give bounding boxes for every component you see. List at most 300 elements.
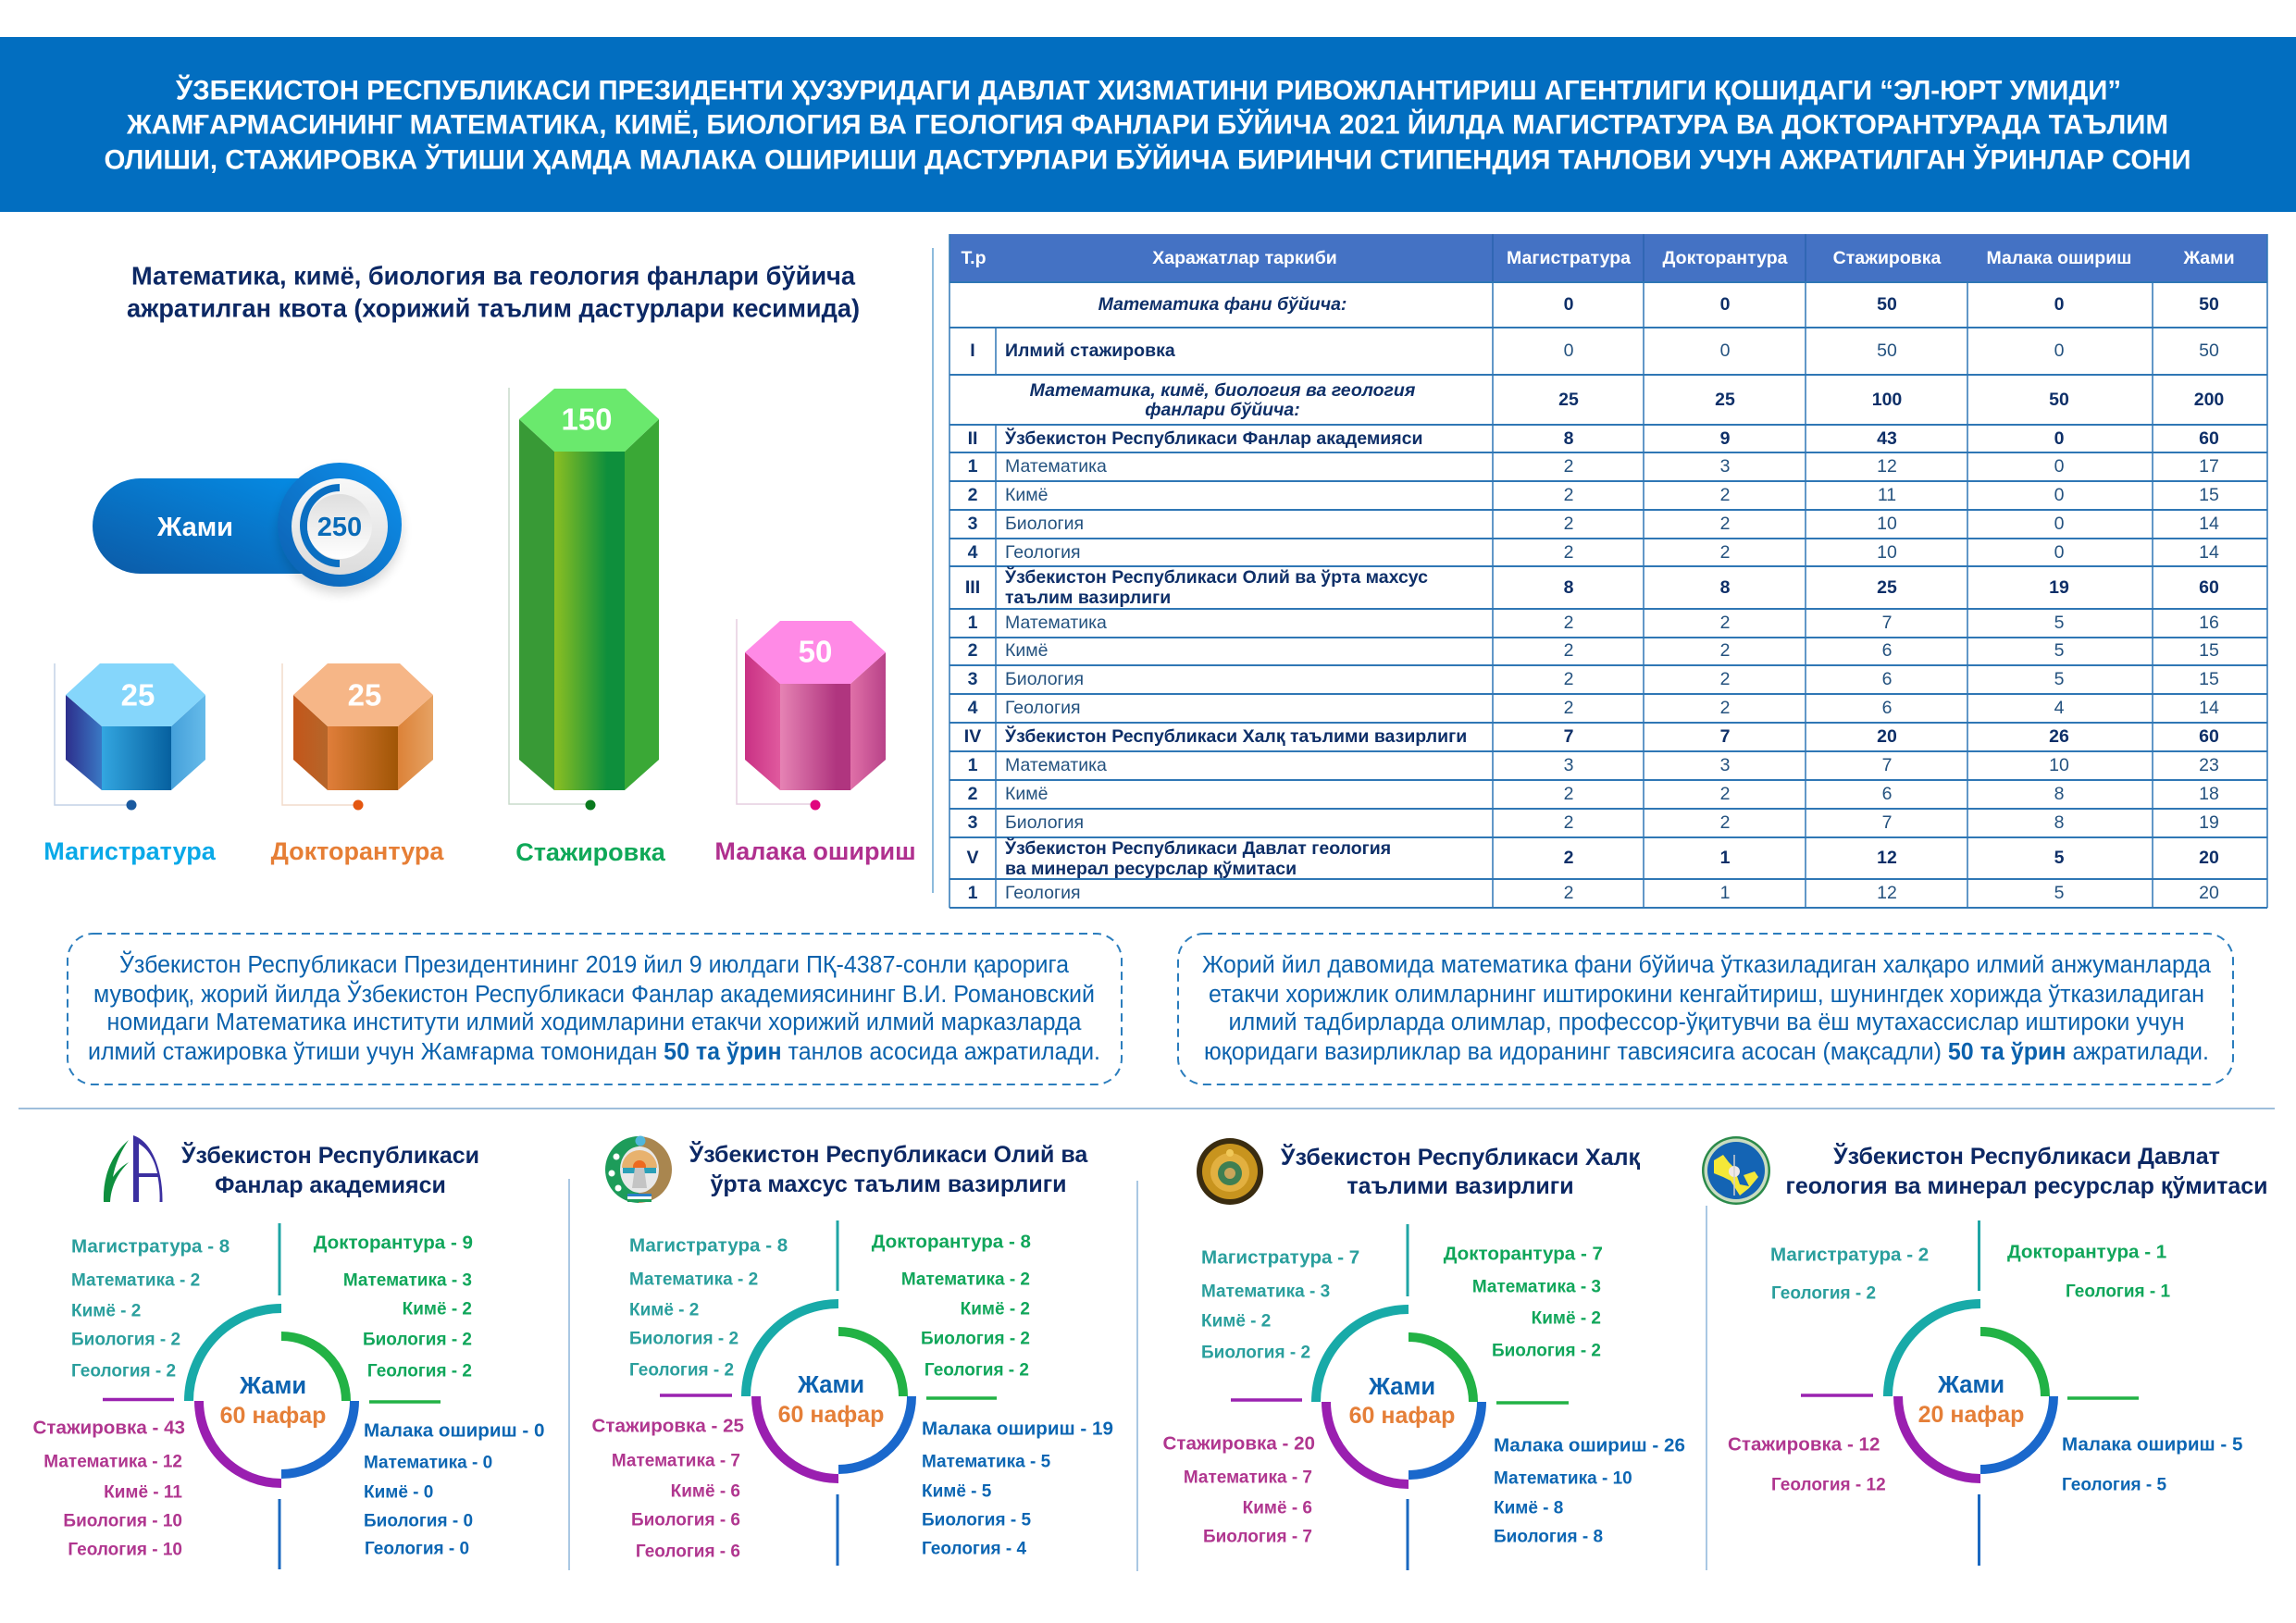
row V [966, 836, 2219, 879]
row I values: 50 [1877, 341, 1897, 361]
row II.4: 14 [2199, 542, 2219, 563]
table header: Магистратура [1507, 248, 1631, 268]
row I values: 50 [2199, 341, 2219, 361]
section row: Математика фани бўйича: Математика фани бўйича: [1098, 294, 1347, 315]
row II.3: 10 [1877, 514, 1897, 534]
ring total: Жами [797, 1372, 864, 1398]
row II.1: 0 [2054, 456, 2065, 477]
ring chart [660, 1220, 997, 1566]
table header: Докторантура [1663, 248, 1788, 268]
row III.3: 6 [1882, 669, 1892, 689]
row III.2: 15 [2199, 640, 2219, 661]
Докторантура list: Кимё - 2 [403, 1299, 472, 1319]
row III.1: 2 [1720, 613, 1730, 633]
row IV.2: Кимё [1005, 784, 1049, 804]
Стажировка list: Геология - 6 [636, 1542, 740, 1562]
section row: all subjects: 50 [2049, 390, 2069, 410]
ring total [778, 1372, 884, 1428]
row V: 12 [1877, 848, 1897, 868]
chart heading: ажратилган квота (хорижий таълим дастурлари кесимида) [127, 294, 860, 322]
Малака ошириш list: Кимё - 5 [922, 1482, 992, 1501]
Магистратура list: Биология - 2 [629, 1329, 738, 1349]
section row: Математика фани бўйича: 0 [2054, 294, 2065, 315]
panel: Давлат геология қўмитаси [1702, 1136, 2268, 1566]
row V.1: Геология [1005, 883, 1081, 903]
row IV.2: 6 [1882, 784, 1892, 804]
Малака ошириш list: Кимё - 0 [364, 1482, 433, 1503]
Магистратура list: Кимё - 2 [629, 1301, 699, 1319]
Малака ошириш list: Биология - 8 [1494, 1527, 1603, 1547]
row II.4: 4 [968, 542, 978, 563]
row III.3: 15 [2199, 669, 2219, 689]
panel: data table [949, 234, 2267, 908]
Докторантура list: Геология - 2 [925, 1360, 1029, 1381]
row IV: 26 [2049, 726, 2069, 747]
Стажировка list: Кимё - 6 [1243, 1499, 1312, 1518]
row III [965, 565, 2219, 608]
Магистратура list: Магистратура - 8 [71, 1236, 230, 1257]
Стажировка list: Геология - 12 [1771, 1475, 1886, 1495]
panel: Фанлар академияси [33, 1135, 544, 1569]
row III.2: 6 [1882, 640, 1892, 661]
row II.2: 15 [2199, 485, 2219, 505]
bar: Докторантура 25: Докторантура [271, 837, 444, 865]
row II.1 [968, 456, 2219, 477]
icon: gold seal [1197, 1138, 1263, 1205]
Магистратура list: Математика - 2 [71, 1271, 200, 1290]
Стажировка list [1163, 1432, 1315, 1547]
row V.1: 1 [1720, 883, 1730, 903]
callout: left note: Ўзбекистон Республикаси Президентининг 2019 йил 9 июлдаги ПҚ-4387-сонли қарорига [119, 950, 1070, 978]
section row: all subjects: 25 [1715, 390, 1735, 410]
ring total: Жами [239, 1373, 306, 1399]
row III.4: 14 [2199, 698, 2219, 718]
row II.4: Геология [1005, 542, 1081, 563]
callout: right note: етакчи хорижлик олимларнинг иштирокини кенгайтириш, шунингдек хорижда ўтказиладиган [1209, 982, 2204, 1008]
row III.3: 5 [2054, 669, 2065, 689]
row III.4 [968, 698, 2219, 718]
row III: 19 [2049, 577, 2069, 598]
row III.4: 4 [2054, 698, 2065, 718]
row IV.2: 2 [968, 784, 978, 804]
panel: Олий ва ўрта махсус таълим вазирлиги [592, 1136, 1113, 1566]
Магистратура list: Геология - 2 [1771, 1284, 1876, 1303]
Малака ошириш list: Математика - 0 [364, 1453, 492, 1473]
Докторантура list [872, 1231, 1031, 1381]
row II.2: Кимё [1005, 485, 1049, 505]
total pill: Жами 250: 250 [317, 513, 362, 542]
panel heading: Ўзбекистон Республикаси Халқ [1280, 1143, 1640, 1171]
row III.2: Кимё [1005, 640, 1049, 661]
row III.1: 1 [968, 613, 978, 633]
panel heading: геология ва минерал ресурслар қўмитаси [1785, 1173, 2268, 1199]
Малака ошириш list: Биология - 5 [922, 1510, 1031, 1530]
row II.1: 17 [2199, 456, 2219, 477]
row I values: 0 [2054, 341, 2065, 361]
row I values: 0 [1564, 341, 1574, 361]
row IV.3: 19 [2199, 812, 2219, 833]
Докторантура list: Математика - 3 [1472, 1277, 1601, 1297]
callout: left note: илмий стажировка ўтиши учун Жамғарма томонидан 50 та ўрин танлов асосида ажратилади. [88, 1039, 1100, 1065]
row IV: 60 [2199, 726, 2219, 747]
row III: 8 [1564, 577, 1574, 598]
section row: Математика фани бўйича: 0 [1720, 294, 1731, 315]
row II.4: 0 [2054, 542, 2065, 563]
Стажировка list [592, 1416, 744, 1562]
Магистратура list [1770, 1244, 1929, 1303]
row IV.1: 23 [2199, 755, 2219, 775]
panel heading: Ўзбекистон Республикаси Олий ва [689, 1140, 1088, 1168]
Малака ошириш list: Математика - 5 [922, 1453, 1051, 1471]
row II.2: 2 [1720, 485, 1730, 505]
row III.3 [968, 669, 2219, 689]
Докторантура list [2007, 1242, 2170, 1301]
section row: all subjects: 25 [1558, 390, 1579, 410]
section row: all subjects [1030, 380, 2224, 420]
Магистратура list: Геология - 2 [629, 1360, 734, 1381]
ring chart [103, 1223, 441, 1569]
ring chart [1231, 1224, 1569, 1570]
Магистратура list: Математика - 3 [1201, 1282, 1330, 1301]
ring total: Жами [1368, 1374, 1435, 1400]
Магистратура list: Математика - 2 [629, 1270, 758, 1290]
row II: 60 [2199, 428, 2219, 449]
row IV: 7 [1564, 726, 1573, 747]
icon: state emblem [605, 1136, 672, 1203]
row II: Ўзбекистон Республикаси Фанлар академияси [1004, 427, 1422, 449]
row IV.2: 18 [2199, 784, 2219, 804]
row II: 0 [2054, 428, 2065, 449]
row III: таълим вазирлиги [1005, 588, 1171, 608]
row IV.2: 8 [2054, 784, 2064, 804]
callout: left note: номидаги Математика институти илмий ходимларини етакчи хорижий илмий марказларда [107, 1010, 1082, 1035]
row II.3: 14 [2199, 514, 2219, 534]
panel heading [1785, 1142, 2268, 1199]
Малака ошириш list: Геология - 4 [922, 1540, 1026, 1558]
row III.2: 2 [1564, 640, 1573, 661]
Докторантура list: Кимё - 2 [961, 1299, 1030, 1319]
row V.1: 1 [968, 883, 978, 903]
row I values: 0 [1720, 341, 1731, 361]
table header: Т.р [961, 248, 987, 268]
bar: Магистратура 25: 25 [121, 677, 155, 712]
Магистратура list [1201, 1247, 1359, 1362]
table header: Стажировка [1833, 248, 1942, 268]
row III.2: 2 [1720, 640, 1730, 661]
row II.1: 1 [968, 456, 978, 477]
callout: right note: Жорий йил давомида математика фани бўйича ўтказиладиган халқаро илмий анжуманларда [1202, 952, 2212, 978]
row II.1: Математика [1005, 456, 1107, 477]
Стажировка list [1728, 1434, 1886, 1495]
row II: II [968, 428, 977, 449]
chart heading [127, 261, 860, 322]
row III.1: Математика [1005, 613, 1107, 633]
Стажировка list: Математика - 12 [43, 1453, 182, 1471]
Магистратура list: Кимё - 2 [71, 1301, 141, 1321]
header banner [0, 37, 2296, 212]
row II.2: 2 [1564, 485, 1573, 505]
row III.1: 5 [2054, 613, 2065, 633]
Докторантура list: Докторантура - 8 [872, 1231, 1031, 1253]
row I: I [970, 341, 975, 361]
row II.4 [968, 542, 2219, 563]
row III.1: 16 [2199, 613, 2219, 633]
row IV.1 [968, 755, 2219, 775]
row II.3: 2 [1564, 514, 1573, 534]
icon: FA logo [104, 1135, 163, 1202]
row III.3: Биология [1005, 669, 1084, 689]
Докторантура list: Математика - 3 [343, 1271, 472, 1290]
Магистратура list: Биология - 2 [1201, 1344, 1310, 1362]
row II: 43 [1877, 428, 1897, 449]
Магистратура list: Кимё - 2 [1201, 1312, 1271, 1331]
Докторантура list: Докторантура - 9 [314, 1233, 473, 1253]
table header: Харажатлар таркиби [1152, 248, 1337, 268]
Стажировка list: Геология - 10 [68, 1540, 182, 1560]
row V: ва минерал ресурслар қўмитаси [1005, 859, 1297, 879]
Стажировка list: Математика - 7 [612, 1451, 740, 1471]
row IV.3: 2 [1720, 812, 1730, 833]
chart heading: Математика, кимё, биология ва геология фанлари бўйича [131, 261, 856, 291]
row IV.2: 2 [1720, 784, 1730, 804]
row III.4: 2 [1720, 698, 1730, 718]
row II.4: 2 [1720, 542, 1730, 563]
panel heading: Ўзбекистон Республикаси Давлат [1832, 1142, 2220, 1170]
row II.2: 0 [2054, 485, 2065, 505]
row III.3: 2 [1720, 669, 1730, 689]
row IV.1: 7 [1882, 755, 1892, 775]
row III.4: 4 [968, 698, 978, 718]
section row: all subjects: фанлари бўйича: [1145, 400, 1300, 420]
row I: Илмий стажировка [1005, 341, 1175, 361]
row V.1: 12 [1877, 883, 1897, 903]
bar: Малака ошириш 50: Малака ошириш [714, 837, 916, 865]
row II.2: 11 [1878, 485, 1896, 505]
Магистратура list: Биология - 2 [71, 1331, 180, 1349]
row II.4: 2 [1564, 542, 1573, 563]
row II.1: 3 [1720, 456, 1730, 477]
Малака ошириш list: Геология - 0 [365, 1540, 469, 1558]
table header: Жами [2182, 248, 2235, 268]
row II.2 [968, 485, 2219, 505]
table header: Малака ошириш [1987, 248, 2131, 268]
row II [968, 427, 2219, 449]
row V: 1 [1720, 848, 1731, 868]
Стажировка list: Стажировка - 12 [1728, 1434, 1880, 1455]
row II.3: 0 [2054, 514, 2065, 534]
row III: 25 [1877, 577, 1897, 598]
Малака ошириш list [1494, 1434, 1685, 1547]
row IV.3: 7 [1882, 812, 1892, 833]
callout: left note [68, 934, 1122, 1084]
bar: Докторантура 25 [271, 663, 444, 865]
Докторантура list: Докторантура - 7 [1444, 1244, 1603, 1264]
ring total [220, 1373, 326, 1429]
row III.1: 7 [1882, 613, 1892, 633]
Докторантура list [314, 1233, 473, 1381]
Докторантура list: Биология - 2 [1492, 1342, 1601, 1360]
ring total: 20 нафар [1918, 1402, 2024, 1428]
row III.3: 3 [968, 669, 978, 689]
row I values [1564, 341, 2219, 361]
row IV.2 [968, 784, 2219, 804]
section row: all subjects: 200 [2194, 390, 2224, 410]
row IV.1: 3 [1720, 755, 1730, 775]
row V: 20 [2199, 848, 2219, 868]
header banner: ЖАМҒАРМАСИНИНГ МАТЕМАТИКА, КИМЁ, БИОЛОГИЯ ВА ГЕОЛОГИЯ ФАНЛАРИ БЎЙИЧА 2021 ЙИЛДА МАГИСТРАТУРА ВА ДОКТОРАНТУРАДА ТАЪЛИМ [126, 109, 2168, 141]
panel heading: Ўзбекистон Республикаси [180, 1141, 479, 1169]
row IV.1: 10 [2049, 755, 2069, 775]
row V: Ўзбекистон Республикаси Давлат геология [1004, 836, 1391, 859]
Стажировка list: Математика - 7 [1184, 1468, 1312, 1488]
Малака ошириш list: Малака ошириш - 19 [922, 1418, 1113, 1440]
bar: Магистратура 25: Магистратура [43, 837, 217, 865]
Стажировка list: Стажировка - 43 [33, 1418, 185, 1438]
panel: quota chart [43, 261, 916, 866]
row IV: IV [964, 726, 981, 747]
Стажировка list: Стажировка - 20 [1163, 1432, 1315, 1455]
bar: Стажировка 150: Стажировка [515, 838, 666, 866]
Стажировка list: Стажировка - 25 [592, 1416, 744, 1436]
row II.3 [968, 514, 2219, 534]
row II.1: 12 [1877, 456, 1897, 477]
callout: left note: мувофиқ, жорий йилда Ўзбекистон Республикаси Фанлар академиясининг В.И. Романовский [93, 980, 1095, 1008]
row IV.1: 1 [968, 755, 978, 775]
Магистратура list: Магистратура - 2 [1770, 1244, 1929, 1266]
row III: III [965, 577, 980, 598]
section row: all subjects: 100 [1872, 390, 1902, 410]
ring chart [1801, 1220, 2139, 1566]
ring total: Жами [1937, 1372, 2004, 1398]
row III.4: Геология [1005, 698, 1081, 718]
bar: Докторантура 25: 25 [348, 677, 381, 712]
Магистратура list: Магистратура - 7 [1201, 1247, 1359, 1268]
section row: Математика фани бўйича [1098, 294, 2219, 315]
ring total: 60 нафар [778, 1402, 884, 1428]
table header [949, 234, 2267, 282]
bar: Стажировка 150: 150 [561, 402, 613, 437]
total pill: Жами 250 [93, 463, 402, 587]
callout: right note [1178, 934, 2233, 1084]
Малака ошириш list: Малака ошириш - 26 [1494, 1434, 1685, 1456]
Докторантура list: Геология - 1 [2066, 1282, 2170, 1301]
Магистратура list [629, 1234, 788, 1381]
row V.1: 5 [2054, 883, 2065, 903]
Малака ошириш list: Малака ошириш - 0 [364, 1419, 544, 1442]
row V.1 [968, 883, 2219, 903]
Стажировка list: Кимё - 6 [671, 1482, 740, 1501]
row IV.1: Математика [1005, 755, 1107, 775]
row III.4: 6 [1882, 698, 1892, 718]
bar: Стажировка 150 [509, 388, 666, 866]
row IV [964, 725, 2219, 747]
row V.1: 20 [2199, 883, 2219, 903]
callout: right note: илмий тадбирларда олимлар, профессор-ўқитувчи ва ёш мутахассислар иштироки учун [1229, 1010, 2184, 1035]
header banner: ОЛИШИ, СТАЖИРОВКА ЎТИШИ ҲАМДА МАЛАКА ОШИРИШИ ДАСТУРЛАРИ БЎЙИЧА БИРИНЧИ СТИПЕНДИЯ ТАНЛОВИ УЧУН АЖРАТИЛГАН ЎРИНЛАР СОНИ [104, 144, 2191, 176]
Докторантура list: Кимё - 2 [1532, 1308, 1601, 1329]
row II: 8 [1564, 428, 1574, 449]
row IV.3: Биология [1005, 812, 1084, 833]
bar: Малака ошириш 50: 50 [799, 635, 832, 668]
row III.4: 2 [1564, 698, 1573, 718]
row II.2: 2 [968, 485, 978, 505]
section row: Математика фани бўйича: 50 [2199, 294, 2219, 315]
row V: V [966, 848, 979, 868]
row V.1: 2 [1564, 883, 1573, 903]
Стажировка list [33, 1418, 185, 1560]
Магистратура list: Магистратура - 8 [629, 1234, 788, 1257]
callout: right note: юқоридаги вазирликлар ва идоранинг тавсиясига асосан (мақсадли) 50 та ўрин ажратилади. [1204, 1039, 2209, 1065]
Докторантура list: Геология - 2 [367, 1362, 472, 1381]
row IV.3: 3 [968, 812, 978, 833]
header banner: ЎЗБЕКИСТОН РЕСПУБЛИКАСИ ПРЕЗИДЕНТИ ҲУЗУРИДАГИ ДАВЛАТ ХИЗМАТИНИ РИВОЖЛАНТИРИШ АГЕНТЛИГИ ҚОШИДАГИ “ЭЛ-ЮРТ УМИДИ” [175, 74, 2121, 105]
Докторантура list [1444, 1244, 1603, 1360]
row II: 9 [1720, 428, 1731, 449]
Малака ошириш list: Математика - 10 [1494, 1469, 1632, 1488]
row IV.2: 2 [1564, 784, 1573, 804]
Стажировка list: Биология - 7 [1203, 1527, 1312, 1547]
row IV.1: 3 [1564, 755, 1573, 775]
Малака ошириш list: Кимё - 8 [1494, 1499, 1563, 1518]
row IV.3: 8 [2054, 812, 2064, 833]
panel heading: ўрта махсус таълим вазирлиги [710, 1171, 1067, 1197]
Докторантура list: Докторантура - 1 [2007, 1242, 2166, 1262]
row III: 8 [1720, 577, 1731, 598]
Магистратура list: Геология - 2 [71, 1362, 176, 1381]
Магистратура list [71, 1236, 230, 1381]
row IV: Ўзбекистон Республикаси Халқ таълими вазирлиги [1004, 725, 1467, 747]
Малака ошириш list: Геология - 5 [2062, 1475, 2166, 1495]
row II.3: Биология [1005, 514, 1084, 534]
row III.1 [968, 613, 2219, 633]
panel heading: Фанлар академияси [215, 1172, 446, 1198]
total pill: Жами 250: Жами [156, 513, 233, 542]
row IV: 7 [1720, 726, 1730, 747]
icon: globe seal [1702, 1136, 1770, 1205]
row III.3: 2 [1564, 669, 1573, 689]
ring total [1349, 1374, 1455, 1429]
row III: 60 [2199, 577, 2219, 598]
row II.3: 3 [968, 514, 978, 534]
row IV: 20 [1877, 726, 1897, 747]
row III.2: 2 [968, 640, 978, 661]
Малака ошириш list [2062, 1434, 2242, 1495]
Докторантура list: Биология - 2 [921, 1329, 1030, 1349]
row IV.3: 2 [1564, 812, 1573, 833]
row III: Ўзбекистон Республикаси Олий ва ўрта махсус [1004, 565, 1428, 588]
panel heading [689, 1140, 1088, 1197]
ring total: 60 нафар [220, 1403, 326, 1429]
panel heading: таълими вазирлиги [1347, 1173, 1574, 1199]
panel: Халқ таълими вазирлиги [1163, 1138, 1685, 1570]
section row: Математика фани бўйича: 50 [1877, 294, 1897, 315]
row II.4: 10 [1877, 542, 1897, 563]
Докторантура list: Биология - 2 [363, 1331, 472, 1349]
bar: Малака ошириш 50 [714, 619, 916, 865]
section row: all subjects: Математика, кимё, биология ва геология [1030, 380, 1416, 401]
Малака ошириш list [364, 1419, 544, 1558]
Стажировка list: Биология - 10 [63, 1512, 182, 1530]
row V: 5 [2054, 848, 2065, 868]
ring total: 60 нафар [1349, 1403, 1455, 1429]
row III.2: 5 [2054, 640, 2065, 661]
Малака ошириш list: Малака ошириш - 5 [2062, 1434, 2242, 1455]
Малака ошириш list [922, 1418, 1113, 1558]
row II.3: 2 [1720, 514, 1730, 534]
row V: 2 [1564, 848, 1574, 868]
Стажировка list: Кимё - 11 [104, 1482, 182, 1503]
ring total [1918, 1372, 2024, 1428]
